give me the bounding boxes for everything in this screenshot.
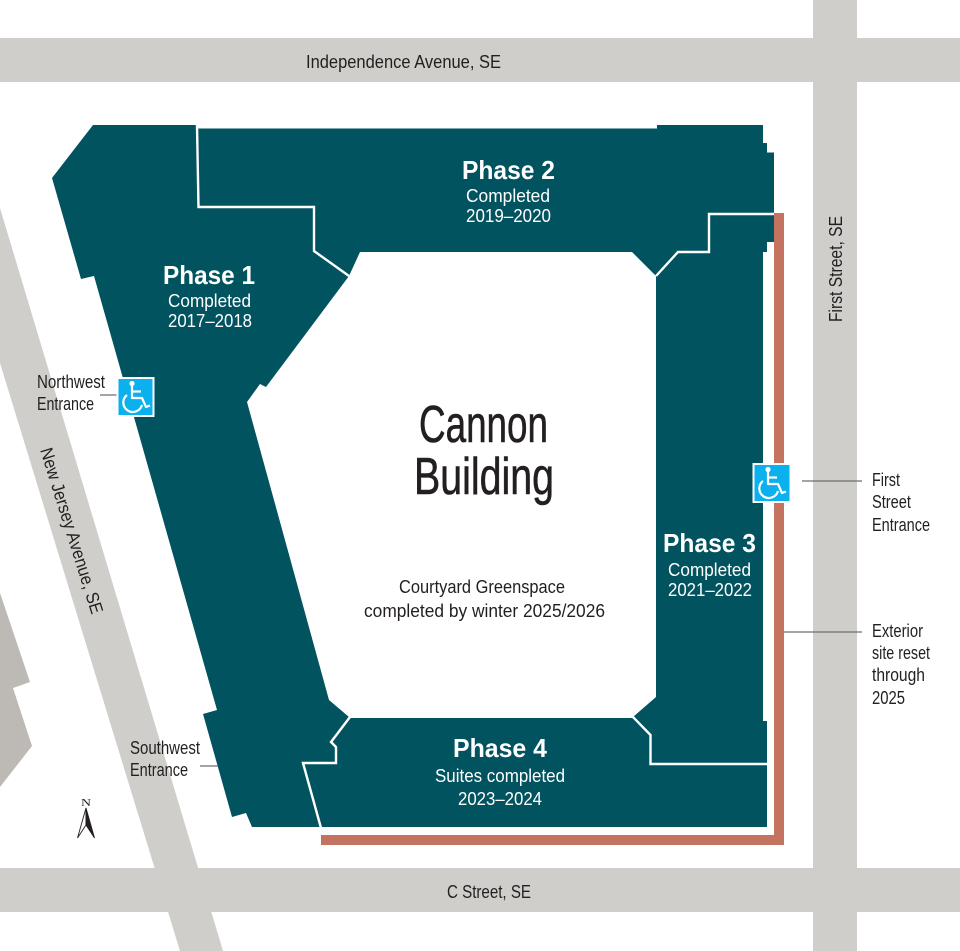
title: Cannon Building: Building (414, 448, 554, 506)
callout: Southwest Entrance: Southwest (130, 738, 200, 758)
title: Cannon Building: Cannon (419, 396, 548, 454)
road: New Jersey Avenue (0, 208, 223, 951)
Phase 2 label: Phase 2 (462, 155, 555, 185)
callout: Exterior site reset (784, 621, 930, 708)
neighbouring building (0, 593, 32, 787)
icon: north arrow (78, 797, 94, 838)
callout: Northwest Entrance: Northwest (37, 372, 105, 392)
label: Independence Avenue: Independence Avenue, SE (306, 52, 501, 72)
courtyard note: Courtyard Greenspace (399, 577, 565, 597)
callout: First Street Entrance (802, 470, 930, 535)
Phase 1 label: Phase 1 (163, 260, 255, 290)
Phase 2 label: Completed (466, 186, 550, 206)
Phase 1 label: Completed (168, 291, 251, 311)
road: Independence Avenue (0, 38, 960, 82)
callout: Exterior site reset: 2025 (872, 688, 905, 708)
Phase 3 label: 2021–2022 (668, 580, 752, 600)
callout: First Street Entrance: Entrance (872, 515, 930, 535)
courtyard note: completed by winter 2025/2026 (364, 601, 605, 621)
callout: Southwest Entrance: Entrance (130, 760, 188, 780)
phase dividers (197, 125, 774, 828)
building wing: Phase 3 (633, 214, 774, 764)
Phase 2 label: 2019–2020 (466, 206, 551, 226)
label: New Jersey Avenue: New Jersey Avenue, SE (36, 445, 107, 616)
Phase 3 label (663, 528, 756, 600)
courtyard note (364, 577, 605, 621)
label: C Street: C Street, SE (447, 882, 531, 902)
callout: Exterior site reset: site reset (872, 643, 930, 663)
building wing: Phase 4 (303, 718, 767, 827)
icon: north arrow: N (81, 797, 91, 809)
exterior site reset border (321, 213, 784, 845)
Phase 4 label: Phase 4 (453, 733, 548, 763)
callout: First Street Entrance: First (872, 470, 900, 490)
icon: accessible First Street Entrance (754, 464, 790, 502)
Phase 3 label: Completed (668, 560, 751, 580)
Phase 3 label: Phase 3 (663, 528, 756, 558)
Phase 4 label: Suites completed (435, 766, 565, 786)
building wing: Phase 1 (52, 125, 349, 827)
callout: First Street Entrance: Street (872, 492, 911, 512)
building wing: Phase 2 (198, 125, 774, 276)
title: Cannon Building (414, 396, 554, 506)
Phase 2 label (462, 155, 555, 226)
callout: Southwest Entrance (130, 738, 218, 780)
road: First Street (813, 0, 857, 951)
Phase 4 label (435, 733, 565, 809)
Phase 1 label (163, 260, 255, 331)
Phase 1 label: 2017–2018 (168, 311, 252, 331)
Phase 4 label: 2023–2024 (458, 789, 542, 809)
callout: Exterior site reset: through (872, 665, 925, 685)
label: First Street: First Street, SE (826, 216, 846, 322)
callout: Northwest Entrance: Entrance (37, 394, 94, 414)
icon: accessible Northwest Entrance (118, 378, 154, 416)
road: C Street (0, 868, 960, 912)
callout: Exterior site reset: Exterior (872, 621, 923, 641)
callout: Northwest Entrance (37, 372, 117, 414)
